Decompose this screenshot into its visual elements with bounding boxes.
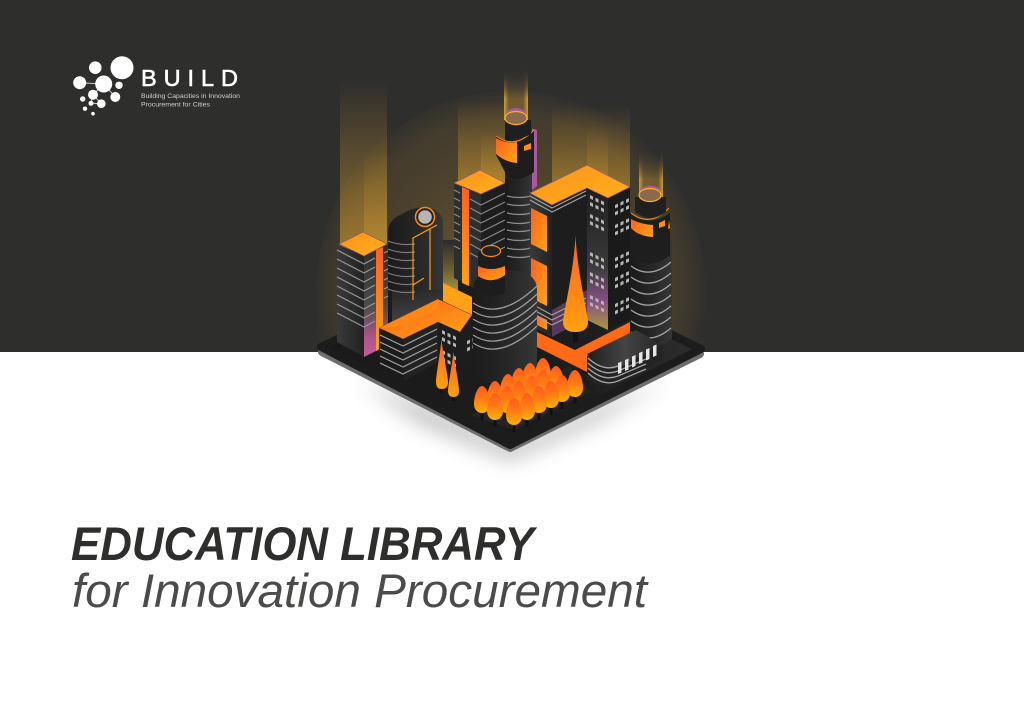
title line 1: EDUCATION LIBRARY [71, 517, 537, 570]
title line 2: for Innovation Procurement [72, 564, 649, 617]
platform surface [321, 255, 701, 445]
building: centre-left [454, 170, 505, 292]
large building faces [530, 193, 552, 337]
tall tower shaft [505, 125, 532, 285]
block stripes [388, 241, 415, 293]
building: large L-shaped [530, 165, 630, 337]
low building roof [379, 299, 472, 339]
front tower neck [478, 252, 505, 296]
annex body [587, 345, 662, 386]
cone trees [436, 235, 588, 401]
tall tower collar body [496, 130, 534, 179]
front tower rings [473, 286, 537, 349]
low building faces [379, 328, 403, 381]
logo wordmark: BUILD [141, 65, 238, 91]
tall tower pink sliver [530, 128, 537, 192]
annex curved lines [588, 358, 646, 383]
block circuit line [413, 225, 437, 300]
centre-left roof [454, 170, 505, 194]
cone: small right [448, 352, 459, 401]
block roof light [416, 208, 434, 226]
low building lines [380, 329, 437, 374]
block body [388, 207, 443, 345]
large building window grids [590, 195, 629, 314]
front tower lens [482, 246, 500, 256]
large building lines [530, 191, 586, 325]
platform edge [322, 352, 700, 448]
tower: tall centre [496, 110, 537, 285]
logo: BUILD [73, 56, 240, 115]
logo tagline: Building Capacities in Innovation [141, 93, 240, 100]
beam: left tower [340, 80, 387, 250]
low building window grids [442, 330, 481, 367]
tall tower glass collar [496, 138, 517, 163]
left tower faces [337, 244, 364, 357]
cone: small left [436, 339, 448, 393]
right tower lens [641, 187, 660, 190]
logo network icon [73, 56, 134, 115]
glowing road [537, 322, 630, 372]
left tower lines [337, 250, 388, 327]
beam: centre-left building [458, 100, 505, 190]
front tower glass band [478, 266, 505, 280]
coloured gap between buildings [440, 240, 458, 290]
cone: large [563, 235, 588, 342]
beam: big building [552, 105, 630, 200]
logo tagline [141, 93, 240, 108]
tree bed [470, 366, 590, 430]
tall tower rings [507, 196, 531, 258]
front tower body [473, 270, 537, 385]
tall tower neck [505, 120, 531, 138]
centre-left faces [454, 183, 481, 292]
tower: front [473, 246, 537, 385]
tower: right [630, 187, 672, 349]
centre-left orange strip [462, 187, 469, 286]
large building roof [530, 165, 630, 205]
tree cluster [474, 358, 583, 432]
low building back wing glass [443, 283, 472, 316]
halo glow [317, 91, 705, 352]
annex top [587, 330, 662, 369]
building: left chevron tower [337, 232, 388, 357]
beam: right tower top [639, 156, 663, 197]
right tower rings [631, 262, 671, 338]
logo tagline: Procurement for Cities [141, 102, 211, 108]
large building glowing windows [531, 208, 547, 252]
beam: tall tower top [504, 74, 528, 120]
right tower glass [631, 219, 653, 237]
left tower roof [339, 232, 387, 256]
annex white bars [618, 344, 656, 374]
centre-left lines [454, 190, 505, 259]
platform [321, 255, 701, 448]
right tower collar rim [631, 208, 669, 219]
building: flat-roof annex [587, 330, 662, 386]
title [71, 517, 649, 617]
left tower orange strip [376, 247, 383, 351]
tall tower lens [507, 110, 525, 113]
right tower body [630, 240, 672, 349]
building: stadium block [388, 207, 443, 345]
ground shadow [360, 380, 665, 458]
dark header band [0, 0, 1024, 352]
building: low L-shaped [379, 283, 481, 381]
light beams behind the city [322, 74, 698, 338]
tall tower collar rim [496, 130, 534, 142]
right tower neck [635, 197, 666, 218]
right tower collar [630, 213, 670, 264]
